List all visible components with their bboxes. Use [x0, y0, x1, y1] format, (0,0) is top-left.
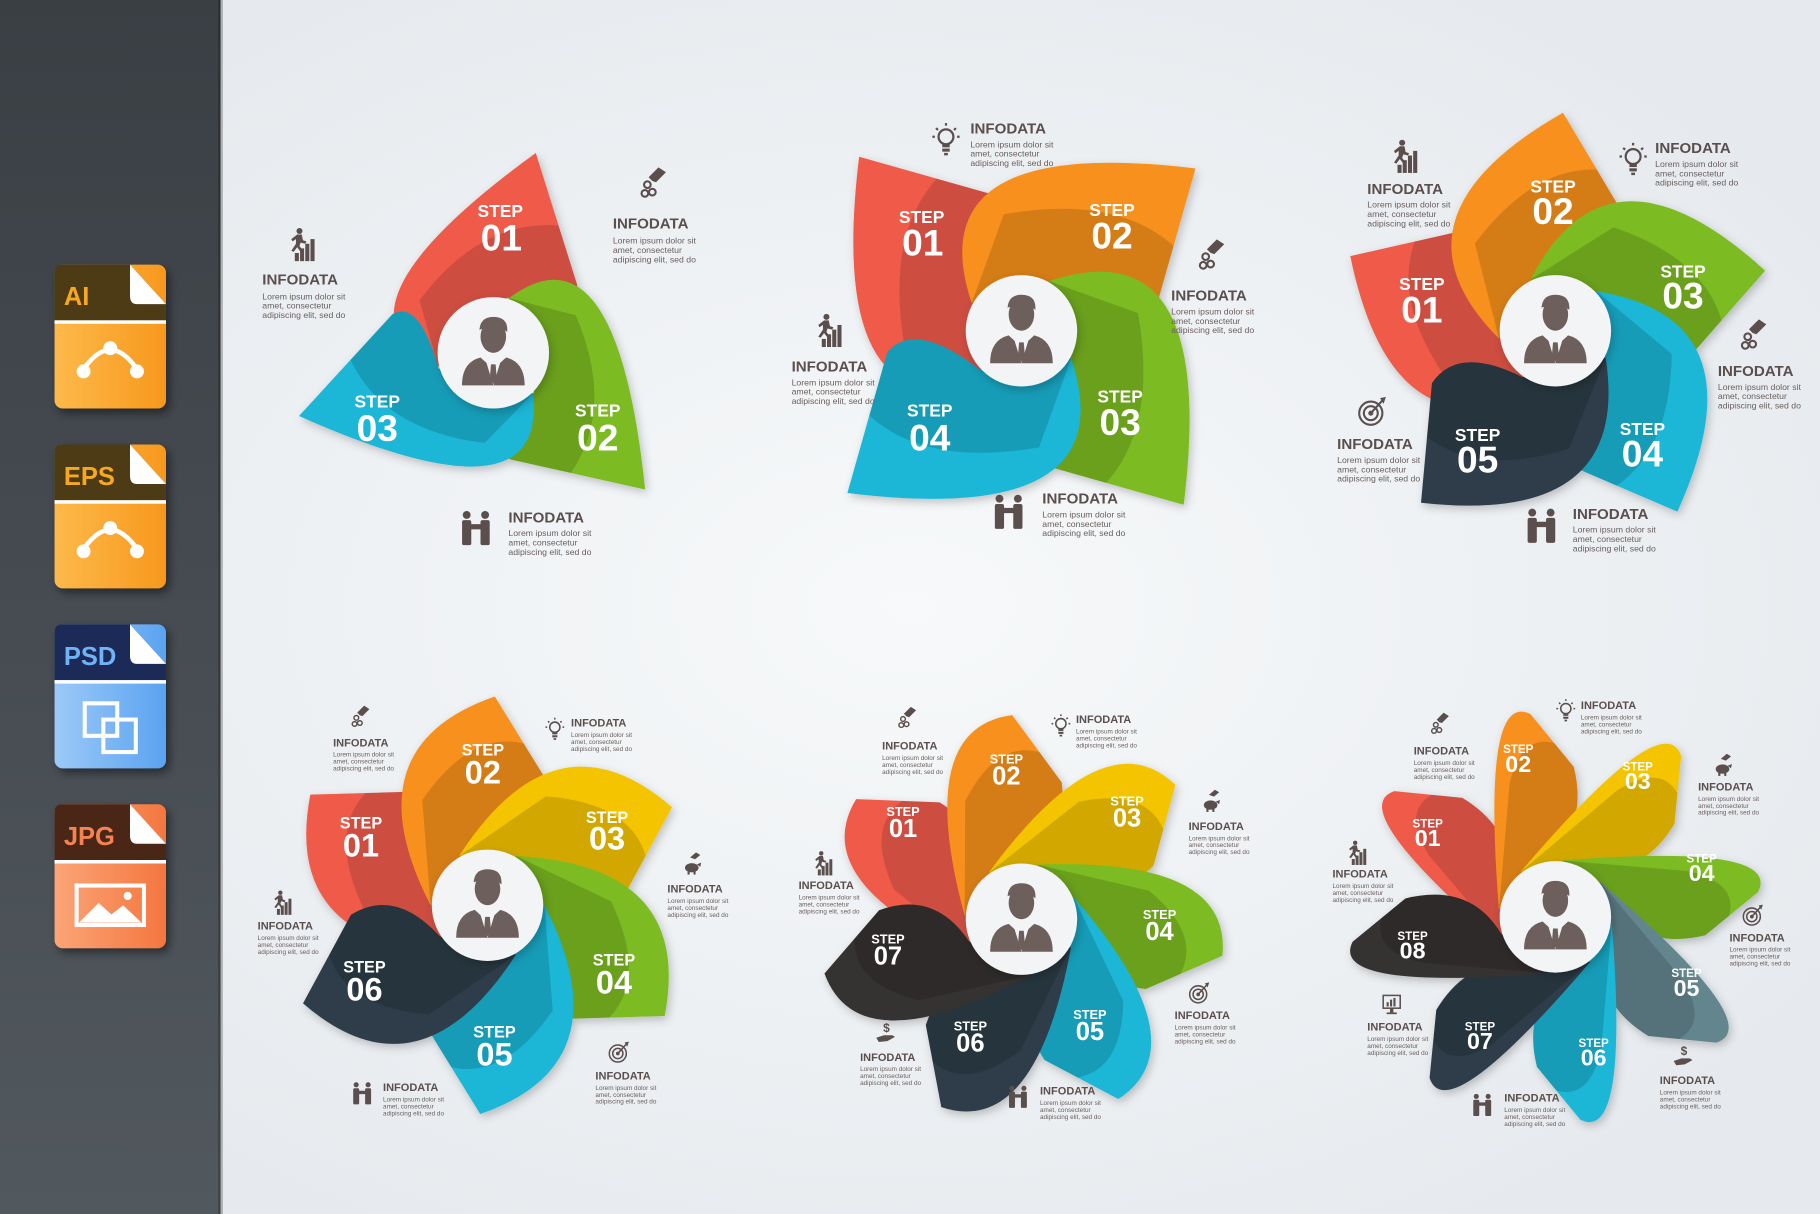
callout: D2 handshake: [995, 491, 1126, 538]
callout: D6 coins: Lorem ipsum dolor sit: [1414, 760, 1475, 767]
callout: D4 piggy: amet, consectetur: [667, 905, 719, 912]
petal: step 06: [277, 855, 531, 1082]
callout: D3 coins: INFODATA: [1718, 363, 1794, 380]
callout: D6 dollar: INFODATA: [1660, 1075, 1715, 1087]
callout: D3 handshake: INFODATA: [1573, 506, 1649, 523]
callout: D2 bulb: adipiscing elit, sed do: [970, 158, 1054, 168]
callout: D2 runner: Lorem ipsum dolor sit: [792, 377, 875, 387]
callout: D4 bulb: amet, consectetur: [571, 739, 623, 746]
callout: D4 target: INFODATA: [595, 1070, 651, 1082]
petal: step 04: [456, 828, 712, 1063]
callout: D4 runner: INFODATA: [258, 921, 313, 933]
callout: D3 coins: Lorem ipsum dolor sit: [1718, 382, 1801, 392]
callout: D3 target: [1337, 397, 1421, 484]
callout: D6 bulb: adipiscing elit, sed do: [1581, 729, 1642, 736]
icon: person hub 4: [432, 850, 543, 961]
callout: D3 target: amet, consectetur: [1337, 464, 1406, 474]
callout: D5 bulb: INFODATA: [1076, 714, 1131, 726]
callout: D4 coins: INFODATA: [333, 737, 388, 749]
labels: 7-step: 02: [992, 763, 1021, 791]
callout: D6 monitor: adipiscing elit, sed do: [1367, 1050, 1429, 1057]
petal: step 01: [384, 131, 603, 391]
callout: D6 piggy: Lorem ipsum dolor sit: [1698, 796, 1759, 803]
callout: D3 handshake: amet, consectetur: [1573, 534, 1642, 544]
callout: D1 infodata coins: [613, 167, 696, 264]
petal: step 03: [980, 733, 1206, 951]
callout: D6 handshake: INFODATA: [1504, 1092, 1560, 1104]
callout: D5 piggy: [1189, 790, 1250, 856]
labels: 3-step: 02: [577, 416, 618, 458]
chart: 6-step diagram: [263, 693, 712, 1117]
labels: 7-step: 07: [874, 942, 902, 970]
callout: D3 handshake: [1528, 506, 1656, 553]
callout: D3 coins: amet, consectetur: [1718, 391, 1787, 401]
callout: D1 infodata runner: amet, consectetur: [262, 301, 331, 311]
callout: D4 handshake: [353, 1082, 444, 1117]
callout: D1 infodata coins: Lorem ipsum dolor sit: [613, 236, 696, 246]
labels: 6-step: STEP: [343, 959, 386, 977]
labels: 8-step: STEP: [1465, 1021, 1495, 1034]
labels: 3-step: 01: [481, 217, 522, 259]
callout: D5 dollar: adipiscing elit, sed do: [860, 1080, 922, 1087]
callout: D3 target: adipiscing elit, sed do: [1337, 474, 1420, 484]
callout: D5 runner: [799, 851, 860, 915]
callout: D6 coins: [1414, 713, 1475, 781]
callout: D5 piggy: amet, consectetur: [1189, 842, 1240, 849]
icon: PSD file: PSD: [64, 643, 116, 671]
callout: D6 piggy: [1698, 754, 1760, 817]
callout: D4 runner: Lorem ipsum dolor sit: [258, 935, 319, 942]
labels: 7-step: STEP: [886, 804, 920, 819]
callout: D2 coins: adipiscing elit, sed do: [1171, 325, 1254, 335]
callout: D5 bulb: [1052, 714, 1137, 749]
petal: step 03: [444, 728, 698, 956]
labels: 6-step: STEP: [593, 952, 635, 970]
petal: step 03: [1520, 719, 1713, 929]
labels: 8-step: STEP: [1671, 967, 1702, 980]
callout: D5 coins: [882, 707, 944, 776]
callout: D1 infodata handshake: Lorem ipsum dolor sit: [508, 528, 592, 538]
labels: 5-step: 02: [1532, 190, 1574, 232]
callout: D6 handshake: amet, consectetur: [1504, 1114, 1556, 1121]
callout: D2 bulb: [932, 120, 1054, 168]
labels: 3-step: 03: [357, 407, 398, 449]
callout: D3 runner: [1367, 140, 1451, 228]
callout: D2 coins: [1171, 239, 1255, 335]
callout: D6 dollar: Lorem ipsum dolor sit: [1660, 1089, 1721, 1096]
callout: D5 piggy: INFODATA: [1189, 821, 1244, 833]
labels: 4-step: 03: [1099, 401, 1141, 443]
callout: D6 coins: adipiscing elit, sed do: [1414, 774, 1475, 781]
petal: step 01: [263, 747, 519, 982]
callout: D1 infodata runner: [262, 228, 346, 320]
icon: EPS file: [55, 445, 166, 588]
callout: D1 infodata handshake: adipiscing elit, sed do: [508, 547, 592, 557]
labels: 7-step: STEP: [1110, 793, 1144, 808]
labels: 5-step: STEP: [1455, 425, 1500, 445]
callout: D5 handshake: Lorem ipsum dolor sit: [1040, 1100, 1101, 1107]
callout: D6 handshake: Lorem ipsum dolor sit: [1504, 1107, 1565, 1114]
callout: D2 bulb: Lorem ipsum dolor sit: [970, 139, 1054, 149]
labels: 6-step: STEP: [586, 809, 628, 827]
labels: 4-step: STEP: [1097, 387, 1143, 407]
callout: D1 infodata runner: Lorem ipsum dolor sit: [262, 291, 346, 301]
callout: D5 target: [1175, 982, 1236, 1045]
chart: 5-step diagram: [1314, 109, 1783, 569]
labels: 7-step: 06: [956, 1030, 985, 1058]
petal: step 02: [429, 257, 716, 540]
petal: step 01: [769, 105, 1089, 428]
callout: D4 piggy: [667, 852, 729, 919]
callout: D6 target: amet, consectetur: [1729, 954, 1781, 961]
callout: D6 target: [1729, 905, 1791, 968]
callout: D3 handshake: adipiscing elit, sed do: [1573, 543, 1656, 553]
icon: person hub 2: [966, 275, 1077, 386]
callout: D4 coins: Lorem ipsum dolor sit: [333, 752, 394, 759]
callout: D4 target: [595, 1042, 657, 1106]
callout: D6 dollar: [1660, 1044, 1721, 1110]
callout: D5 piggy: adipiscing elit, sed do: [1189, 849, 1250, 856]
petal: step 02: [398, 693, 551, 909]
callout: D5 dollar: amet, consectetur: [860, 1073, 912, 1080]
callout: D4 target: adipiscing elit, sed do: [595, 1099, 657, 1106]
icon: person hub 1: [438, 297, 549, 409]
callout: D2 handshake: INFODATA: [1042, 491, 1118, 508]
callout: D5 coins: amet, consectetur: [882, 762, 934, 769]
petal: step 04: [795, 263, 1119, 583]
labels: 7-step: STEP: [954, 1019, 987, 1034]
labels: 5-step: 03: [1662, 275, 1704, 317]
labels: 6-step: [340, 742, 635, 1072]
labels: 4-step: STEP: [1089, 200, 1135, 220]
labels: 3-step: STEP: [575, 401, 620, 421]
labels: 6-step: 05: [476, 1036, 513, 1072]
labels: 8-step: STEP: [1579, 1037, 1609, 1050]
labels: 5-step: 04: [1622, 433, 1663, 475]
petal: step 04: [1496, 263, 1766, 548]
callout: D5 runner: amet, consectetur: [799, 901, 850, 908]
callout: D4 piggy: adipiscing elit, sed do: [667, 912, 729, 919]
labels: 6-step: 03: [589, 821, 625, 857]
callout: D6 target: Lorem ipsum dolor sit: [1729, 947, 1791, 954]
callout: D4 bulb: INFODATA: [571, 718, 626, 730]
labels: 8-step: STEP: [1623, 761, 1653, 774]
callout: D4 bulb: [545, 718, 632, 753]
callout: D2 bulb: amet, consectetur: [970, 149, 1040, 159]
callout: D4 target: amet, consectetur: [595, 1092, 647, 1099]
petal: step 07: [1398, 905, 1590, 1115]
callout: D5 handshake: amet, consectetur: [1040, 1107, 1092, 1114]
callout: D5 coins: INFODATA: [882, 741, 937, 753]
callout: D6 runner: amet, consectetur: [1332, 890, 1384, 897]
callout: D6 runner: INFODATA: [1332, 868, 1388, 880]
labels: 6-step: STEP: [473, 1024, 516, 1042]
callout: D3 bulb: Lorem ipsum dolor sit: [1655, 159, 1739, 169]
callout: D3 runner: INFODATA: [1367, 181, 1443, 198]
labels: 5-step: [1399, 177, 1706, 480]
callout: D2 handshake: amet, consectetur: [1042, 519, 1111, 529]
callout: D4 target: Lorem ipsum dolor sit: [595, 1085, 657, 1092]
icon: EPS file: EPS: [64, 463, 115, 491]
petal: step 05: [1543, 882, 1753, 1075]
callout: D3 bulb: amet, consectetur: [1655, 168, 1724, 178]
callout: D5 target: amet, consectetur: [1175, 1031, 1226, 1038]
callout: D2 bulb: INFODATA: [970, 120, 1046, 137]
callout: D6 monitor: amet, consectetur: [1367, 1043, 1419, 1050]
callout: D5 target: adipiscing elit, sed do: [1175, 1038, 1236, 1045]
petal: step 06: [1520, 924, 1635, 1128]
callout: D6 piggy: amet, consectetur: [1698, 803, 1750, 810]
callout: D3 runner: Lorem ipsum dolor sit: [1367, 200, 1451, 210]
callout: D6 dollar: amet, consectetur: [1660, 1096, 1711, 1103]
callout: D4 handshake: Lorem ipsum dolor sit: [383, 1096, 444, 1103]
callout: D4 piggy: Lorem ipsum dolor sit: [667, 898, 729, 905]
callout: D1 infodata coins: amet, consectetur: [613, 245, 682, 255]
icon: AI file: [55, 265, 166, 409]
callout: D4 piggy: INFODATA: [667, 884, 723, 896]
callout: D5 coins: Lorem ipsum dolor sit: [882, 755, 943, 762]
callout: D5 dollar: Lorem ipsum dolor sit: [860, 1066, 921, 1073]
callout: D6 piggy: INFODATA: [1698, 781, 1753, 793]
petal: step 04: [1562, 837, 1766, 952]
callout: D3 coins: [1718, 319, 1801, 411]
callout: D5 dollar: INFODATA: [860, 1052, 915, 1064]
labels: 4-step: 04: [909, 416, 951, 458]
callout: D4 runner: adipiscing elit, sed do: [258, 949, 319, 956]
petal: step 02: [1475, 706, 1591, 910]
petal: step 02: [943, 713, 1068, 916]
callout: D5 handshake: adipiscing elit, sed do: [1040, 1114, 1101, 1121]
petal: step 02: [1448, 109, 1628, 343]
callout: D5 dollar: [860, 1021, 922, 1087]
callout: D5 piggy: Lorem ipsum dolor sit: [1189, 835, 1250, 842]
callout: D6 coins: amet, consectetur: [1414, 767, 1465, 774]
callout: D6 bulb: [1556, 699, 1642, 736]
labels: 8-step: STEP: [1413, 818, 1443, 831]
labels: 5-step: 05: [1457, 438, 1498, 480]
callout: D4 coins: adipiscing elit, sed do: [333, 766, 395, 773]
labels: 6-step: 04: [596, 964, 632, 1000]
chart: 7-step diagram: [812, 713, 1235, 1134]
callout: D1 infodata coins: INFODATA: [613, 216, 689, 233]
callout: D2 coins: Lorem ipsum dolor sit: [1171, 307, 1255, 317]
petal: step 03: [1516, 168, 1783, 396]
labels: 7-step: STEP: [990, 752, 1023, 767]
callout: D3 bulb: INFODATA: [1655, 140, 1731, 157]
labels: 7-step: 03: [1113, 804, 1141, 832]
labels: 4-step: [899, 200, 1143, 458]
callout: D5 bulb: amet, consectetur: [1076, 735, 1128, 742]
labels: 6-step: STEP: [462, 742, 504, 760]
labels: 7-step: STEP: [1073, 1007, 1107, 1022]
callout: D2 coins: INFODATA: [1171, 288, 1247, 305]
callout: D4 handshake: amet, consectetur: [383, 1103, 435, 1110]
petal: step 08: [1344, 881, 1548, 997]
petal: step 05: [983, 892, 1179, 1121]
labels: 8-step: 06: [1581, 1044, 1607, 1070]
callout: D5 bulb: Lorem ipsum dolor sit: [1076, 729, 1137, 736]
labels: 8-step: 04: [1689, 860, 1715, 886]
labels: 8-step: 01: [1415, 825, 1441, 851]
callout: D4 handshake: adipiscing elit, sed do: [383, 1110, 444, 1117]
panel: format sidebar: [0, 0, 223, 1214]
labels: 8-step: 05: [1674, 975, 1700, 1001]
labels: 4-step: STEP: [907, 401, 952, 421]
icon: JPG file: JPG: [64, 823, 115, 851]
petal: step 06: [898, 906, 1083, 1134]
callout: D2 runner: [792, 314, 875, 406]
callout: D2 runner: adipiscing elit, sed do: [792, 396, 875, 406]
labels: 6-step: 01: [343, 828, 379, 864]
callout: D4 coins: [333, 706, 395, 773]
labels: 3-step: STEP: [478, 201, 523, 221]
callout: D3 target: INFODATA: [1337, 436, 1413, 453]
callout: D6 target: adipiscing elit, sed do: [1729, 961, 1791, 968]
labels: 8-step: 03: [1625, 768, 1651, 794]
callout: D4 bulb: Lorem ipsum dolor sit: [571, 732, 632, 739]
callout: D6 handshake: adipiscing elit, sed do: [1504, 1121, 1566, 1128]
labels: 8-step: 02: [1505, 751, 1531, 777]
labels: 5-step: STEP: [1620, 419, 1665, 439]
labels: 6-step: 02: [465, 754, 501, 790]
labels: 4-step: 01: [902, 221, 943, 263]
chart: 4-step diagram: [769, 78, 1274, 583]
callout: D4 runner: amet, consectetur: [258, 942, 309, 949]
labels: 5-step: 01: [1401, 289, 1443, 331]
icon: AI file: AI: [64, 283, 89, 311]
labels: 8-step: 08: [1400, 938, 1426, 964]
callout: D2 handshake: adipiscing elit, sed do: [1042, 528, 1126, 538]
callout: D6 coins: INFODATA: [1414, 745, 1469, 757]
callout: D5 coins: adipiscing elit, sed do: [882, 769, 944, 776]
callout: D5 handshake: [1009, 1085, 1101, 1121]
petal: step 05: [424, 901, 577, 1117]
callout: D6 handshake: [1473, 1092, 1566, 1128]
labels: 8-step: STEP: [1686, 852, 1717, 865]
petal: step 01: [815, 761, 1044, 972]
callout: D4 coins: amet, consectetur: [333, 759, 385, 766]
labels: 7-step: 05: [1076, 1018, 1104, 1046]
callout: D6 runner: [1332, 841, 1394, 904]
labels: 5-step: STEP: [1530, 177, 1576, 197]
callout: D6 monitor: INFODATA: [1367, 1022, 1423, 1034]
callout: D4 handshake: INFODATA: [383, 1082, 438, 1094]
callout: D6 runner: Lorem ipsum dolor sit: [1332, 883, 1394, 890]
callout: D3 runner: amet, consectetur: [1367, 209, 1436, 219]
labels: 6-step: STEP: [340, 815, 382, 833]
callout: D2 runner: amet, consectetur: [792, 387, 861, 397]
labels: 3-step: [355, 201, 620, 458]
callout: D5 bulb: adipiscing elit, sed do: [1076, 742, 1137, 749]
callout: D5 handshake: INFODATA: [1040, 1085, 1095, 1097]
callout: D1 infodata runner: INFODATA: [262, 271, 338, 288]
callout: D5 runner: INFODATA: [799, 880, 854, 892]
icon: person hub 6: [1500, 861, 1611, 973]
callout: D2 coins: amet, consectetur: [1171, 316, 1240, 326]
callout: D4 runner: [258, 891, 319, 956]
labels: 6-step: 06: [346, 971, 383, 1007]
petal: step 02: [924, 78, 1247, 398]
callout: D6 runner: adipiscing elit, sed do: [1332, 897, 1394, 904]
callout: D3 target: Lorem ipsum dolor sit: [1337, 455, 1421, 465]
labels: 5-step: STEP: [1399, 274, 1445, 294]
petal: step 05: [1370, 283, 1646, 569]
labels: 5-step: STEP: [1660, 261, 1706, 281]
callout: D6 bulb: INFODATA: [1581, 700, 1636, 712]
labels: 8-step: STEP: [1397, 930, 1428, 943]
petal: step 03: [954, 234, 1274, 557]
callout: D5 target: INFODATA: [1175, 1010, 1230, 1022]
icon: PSD file: [55, 624, 166, 768]
chart: 3-step diagram: [278, 131, 716, 540]
callout: D3 handshake: Lorem ipsum dolor sit: [1573, 525, 1656, 535]
labels: 7-step: 01: [889, 815, 917, 843]
icon: person hub 3: [1500, 275, 1611, 386]
callout: D2 handshake: Lorem ipsum dolor sit: [1042, 510, 1126, 520]
callout: D6 target: INFODATA: [1729, 932, 1785, 944]
labels: 8-step: [1397, 743, 1717, 1070]
callout: D2 runner: INFODATA: [792, 358, 867, 375]
petal: step 01: [1314, 195, 1587, 435]
callout: D6 monitor: Lorem ipsum dolor sit: [1367, 1036, 1428, 1043]
labels: 8-step: 07: [1467, 1028, 1493, 1054]
callout: D6 bulb: amet, consectetur: [1581, 722, 1632, 729]
callout: D5 target: Lorem ipsum dolor sit: [1175, 1024, 1236, 1031]
callout: D5 runner: adipiscing elit, sed do: [799, 908, 860, 915]
petal: step 04: [1019, 852, 1235, 1002]
callout: D6 dollar: adipiscing elit, sed do: [1660, 1103, 1721, 1110]
labels: 7-step: STEP: [1143, 907, 1177, 922]
callout: D1 infodata handshake: amet, consectetur: [508, 537, 578, 547]
labels: 7-step: 04: [1145, 918, 1175, 946]
icon: JPG file: [55, 804, 166, 948]
callout: D1 infodata handshake: INFODATA: [508, 509, 584, 526]
callout: D6 monitor: [1367, 995, 1429, 1057]
callout: D1 infodata runner: adipiscing elit, sed do: [262, 310, 346, 320]
callout: D3 runner: adipiscing elit, sed do: [1367, 218, 1451, 228]
callout: D4 bulb: adipiscing elit, sed do: [571, 746, 632, 753]
callout: D3 coins: adipiscing elit, sed do: [1718, 401, 1801, 411]
labels: 3-step: STEP: [355, 391, 400, 411]
callout: D3 bulb: [1620, 140, 1739, 188]
callout: D5 runner: Lorem ipsum dolor sit: [799, 894, 860, 901]
labels: 4-step: STEP: [899, 207, 944, 227]
labels: 8-step: STEP: [1503, 743, 1534, 756]
labels: 7-step: [871, 752, 1177, 1058]
labels: 4-step: 02: [1091, 214, 1133, 256]
callout: D6 piggy: adipiscing elit, sed do: [1698, 810, 1760, 817]
icon: person hub 5: [966, 863, 1077, 975]
labels: 7-step: STEP: [871, 932, 905, 947]
petal: step 03: [278, 280, 550, 517]
callout: D1 infodata handshake: [462, 509, 592, 557]
petal: step 07: [812, 876, 1034, 1040]
callout: D3 bulb: adipiscing elit, sed do: [1655, 178, 1738, 188]
callout: D6 bulb: Lorem ipsum dolor sit: [1581, 715, 1642, 722]
callout: D1 infodata coins: adipiscing elit, sed do: [613, 254, 696, 264]
petal: step 01: [1358, 759, 1568, 952]
chart: 8-step diagram: [1344, 706, 1766, 1128]
